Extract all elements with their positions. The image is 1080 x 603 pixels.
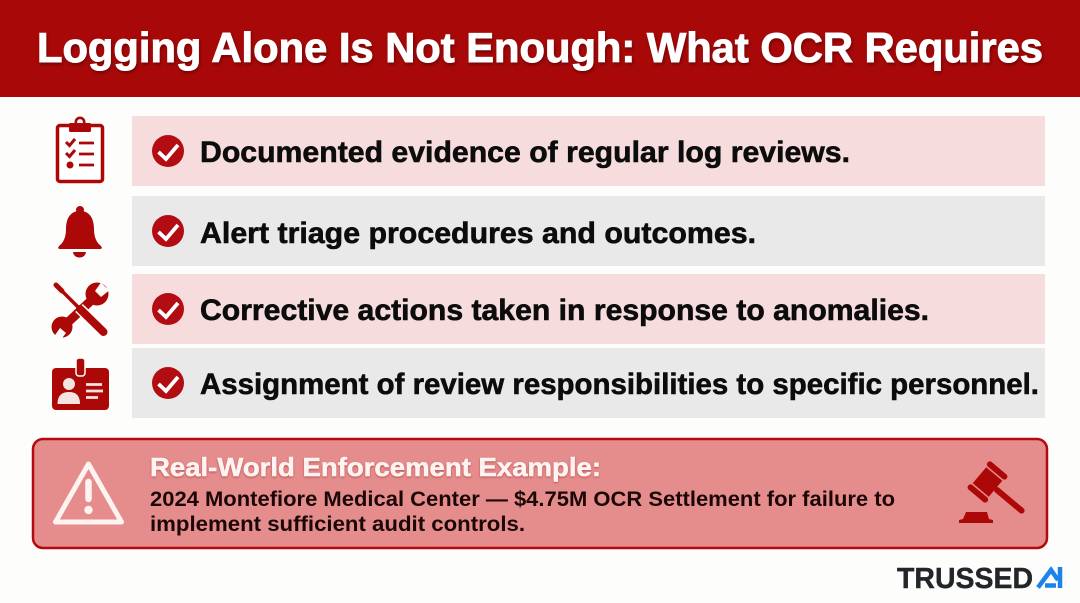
icon: check badge [152, 367, 184, 399]
icon: warning triangle [56, 464, 122, 522]
icon: id badge [52, 358, 109, 410]
row text: Documented evidence of regular log reviews. [200, 136, 850, 169]
callout body [150, 488, 895, 536]
logo: TRUSSEDAI: TRUSSED [897, 563, 1033, 595]
icon: clipboard checklist [58, 118, 102, 182]
panel: row 3 corrective actions [132, 274, 1045, 344]
title: Logging Alone Is Not Enough: What OCR Requires [37, 24, 1043, 71]
row text: Assignment of review responsibilities to specific personnel. [200, 368, 1039, 401]
callout body: 2024 Montefiore Medical Center — $4.75M OCR Settlement for failure to [150, 488, 895, 511]
title banner [0, 0, 1080, 97]
panel: row 2 alert triage [132, 196, 1045, 266]
icon: check badge [152, 293, 184, 325]
icon: check badge [152, 215, 184, 247]
icon: crossed wrench and screwdriver [52, 282, 109, 342]
row text: Corrective actions taken in response to anomalies. [200, 294, 929, 327]
icon: check badge [152, 135, 184, 167]
callout heading: Real-World Enforcement Example: [150, 452, 601, 482]
panel: enforcement callout [33, 439, 1047, 548]
panel: row 1 documented evidence [132, 116, 1045, 186]
logo mark [1038, 567, 1060, 588]
icon: bell [58, 206, 102, 258]
row text: Alert triage procedures and outcomes. [200, 217, 756, 250]
callout body: implement sufficient audit controls. [150, 513, 525, 536]
icon: gavel [959, 460, 1035, 526]
panel: row 4 assignment [132, 348, 1045, 418]
